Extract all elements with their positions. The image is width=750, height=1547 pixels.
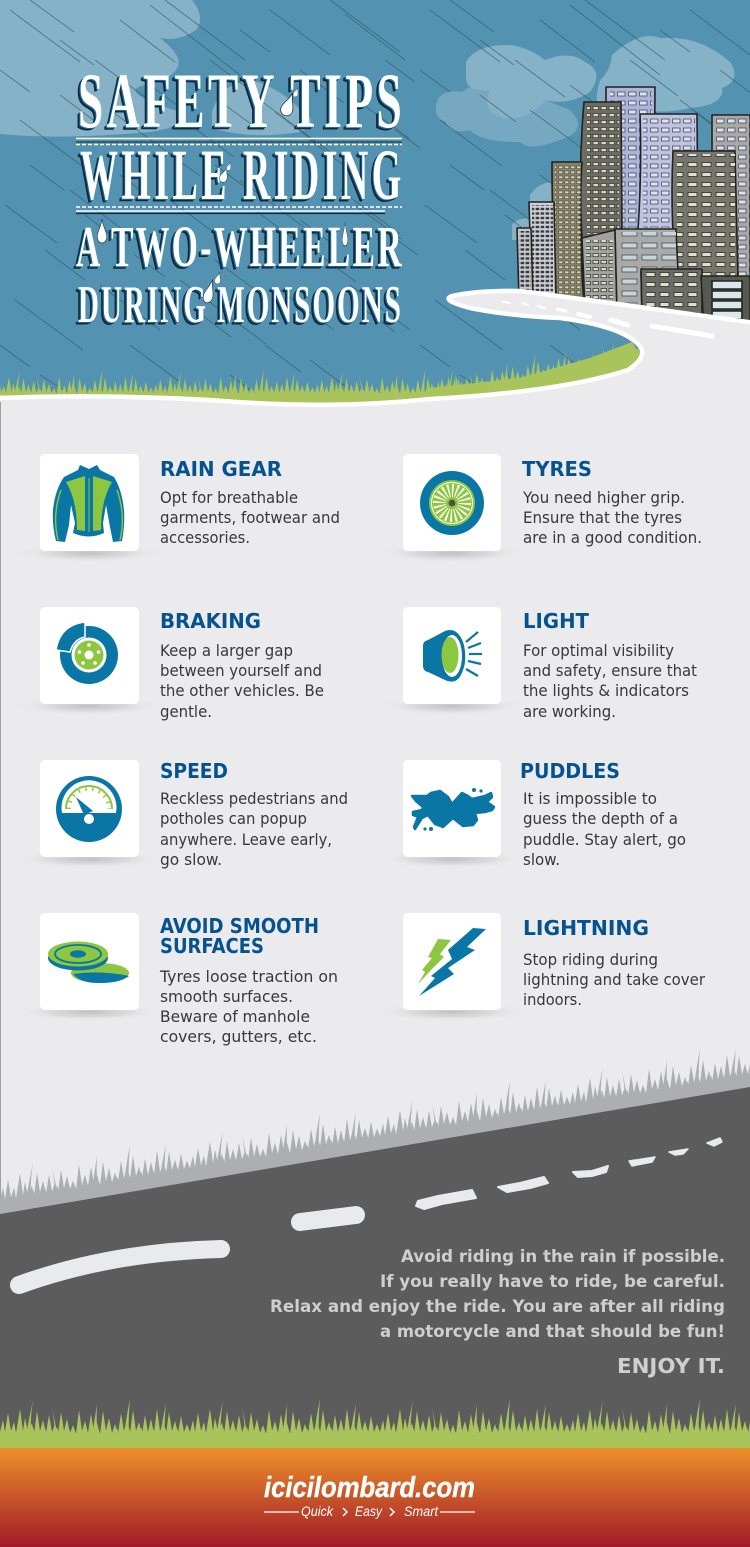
lavender tower xyxy=(638,114,698,230)
description: Reckless pedestrians and xyxy=(160,789,348,808)
tip: light xyxy=(380,607,697,721)
icon: tyre xyxy=(420,471,484,535)
description: are working. xyxy=(523,702,616,721)
description xyxy=(160,488,340,547)
description: accessories. xyxy=(160,528,250,547)
description: and safety, ensure that xyxy=(523,661,697,680)
description xyxy=(523,950,705,1009)
closing message xyxy=(270,1247,725,1342)
description: Stop riding during xyxy=(523,950,658,969)
sky background xyxy=(0,0,750,410)
description: go slow. xyxy=(160,850,222,869)
enjoy it: ENJOY IT. xyxy=(617,1354,725,1378)
description: indoors. xyxy=(523,990,582,1009)
description xyxy=(523,789,686,869)
tip: braking xyxy=(17,607,324,721)
closing message: a motorcycle and that should be fun! xyxy=(380,1322,725,1342)
heading: SURFACES xyxy=(160,934,264,958)
icon: jacket xyxy=(53,465,124,542)
description: Ensure that the tyres xyxy=(523,508,682,527)
heading: BRAKING xyxy=(160,609,261,633)
icon: speedometer xyxy=(56,776,122,842)
city buildings xyxy=(517,87,750,330)
tip: lightning xyxy=(380,913,705,1021)
grey grass along lower road xyxy=(0,1039,750,1216)
description: the lights & indicators xyxy=(523,681,689,700)
icon: puddle splash xyxy=(412,788,494,831)
description: smooth surfaces. xyxy=(160,987,293,1006)
title: WHILE RIDING xyxy=(80,135,405,215)
tip: tyres xyxy=(380,454,702,562)
icon: manhole cover xyxy=(48,942,129,983)
description: are in a good condition. xyxy=(523,528,702,547)
description: It is impossible to xyxy=(523,789,657,808)
road centre dashes xyxy=(503,302,712,336)
heading: RAIN GEAR xyxy=(160,457,282,481)
heading: PUDDLES xyxy=(520,759,620,783)
tall blue tower xyxy=(606,87,655,236)
green grass strip xyxy=(0,1399,750,1448)
closing message: Relax and enjoy the ride. You are after all riding xyxy=(270,1297,725,1317)
description: puddle. Stay alert, go xyxy=(523,830,686,849)
heading xyxy=(160,914,319,958)
tagline xyxy=(301,1504,439,1519)
dark front block xyxy=(641,269,702,320)
wide grey block xyxy=(615,229,678,312)
pale tower xyxy=(529,202,556,304)
olive tower xyxy=(552,162,584,304)
left edge line xyxy=(0,402,1,1448)
heading: TYRES xyxy=(522,457,592,481)
icon: lightning bolts xyxy=(418,928,486,996)
description: Opt for breathable xyxy=(160,488,298,507)
far right grey tower xyxy=(712,115,750,285)
title xyxy=(73,57,405,334)
closing message: If you really have to ride, be careful. xyxy=(380,1272,725,1292)
footer band xyxy=(0,1448,750,1547)
tip: rain gear xyxy=(17,454,340,562)
description: Beware of manhole xyxy=(160,1007,310,1026)
title: A TWO-WHEELER xyxy=(76,214,404,279)
description: guess the depth of a xyxy=(523,809,678,828)
lower road dashes xyxy=(19,1138,722,1285)
title: SAFETY TIPS xyxy=(78,57,405,144)
footer logo xyxy=(264,1472,475,1519)
closing message: Avoid riding in the rain if possible. xyxy=(401,1247,725,1267)
heading: AVOID SMOOTH xyxy=(160,914,319,938)
lower road xyxy=(0,1087,750,1450)
description: potholes can popup xyxy=(160,809,307,828)
description xyxy=(160,789,348,869)
description: the other vehicles. Be xyxy=(160,681,324,700)
tagline: Easy xyxy=(355,1504,383,1519)
description: slow. xyxy=(523,850,560,869)
dark grey tower xyxy=(672,151,738,280)
description: covers, gutters, etc. xyxy=(160,1027,317,1046)
description: garments, footwear and xyxy=(160,508,340,527)
title: DURING MONSOONS xyxy=(78,276,403,334)
mid grey block xyxy=(582,230,617,310)
description: Keep a larger gap xyxy=(160,641,293,660)
description: You need higher grip. xyxy=(522,488,685,507)
tip: avoid smooth surfaces xyxy=(17,913,338,1046)
tip: speed xyxy=(17,759,348,869)
winding road and ground xyxy=(0,291,750,430)
description: anywhere. Leave early, xyxy=(160,830,332,849)
description: gentle. xyxy=(160,702,212,721)
description xyxy=(522,488,702,547)
description: lightning and take cover xyxy=(523,970,705,989)
description: Tyres loose traction on xyxy=(159,967,338,986)
website name: icicilombard.com xyxy=(264,1472,475,1504)
heading: SPEED xyxy=(160,759,228,783)
road edge line xyxy=(0,291,750,405)
description xyxy=(160,641,324,721)
heading: LIGHTNING xyxy=(523,916,649,940)
darkest front block xyxy=(701,276,750,330)
tagline: Quick xyxy=(301,1504,334,1519)
description xyxy=(523,641,697,721)
icon: brake disc xyxy=(56,622,118,684)
description: For optimal visibility xyxy=(523,641,674,660)
description: between yourself and xyxy=(160,661,322,680)
description xyxy=(159,967,338,1046)
clouds xyxy=(0,0,734,240)
rain streaks xyxy=(0,0,750,400)
dark brown tower xyxy=(580,102,622,238)
heading: LIGHT xyxy=(523,609,589,633)
small left tower xyxy=(517,228,533,300)
tagline: Smart xyxy=(404,1504,439,1519)
grass along top road xyxy=(0,317,748,410)
tip: puddles xyxy=(380,759,686,869)
icon: headlight xyxy=(423,630,482,682)
